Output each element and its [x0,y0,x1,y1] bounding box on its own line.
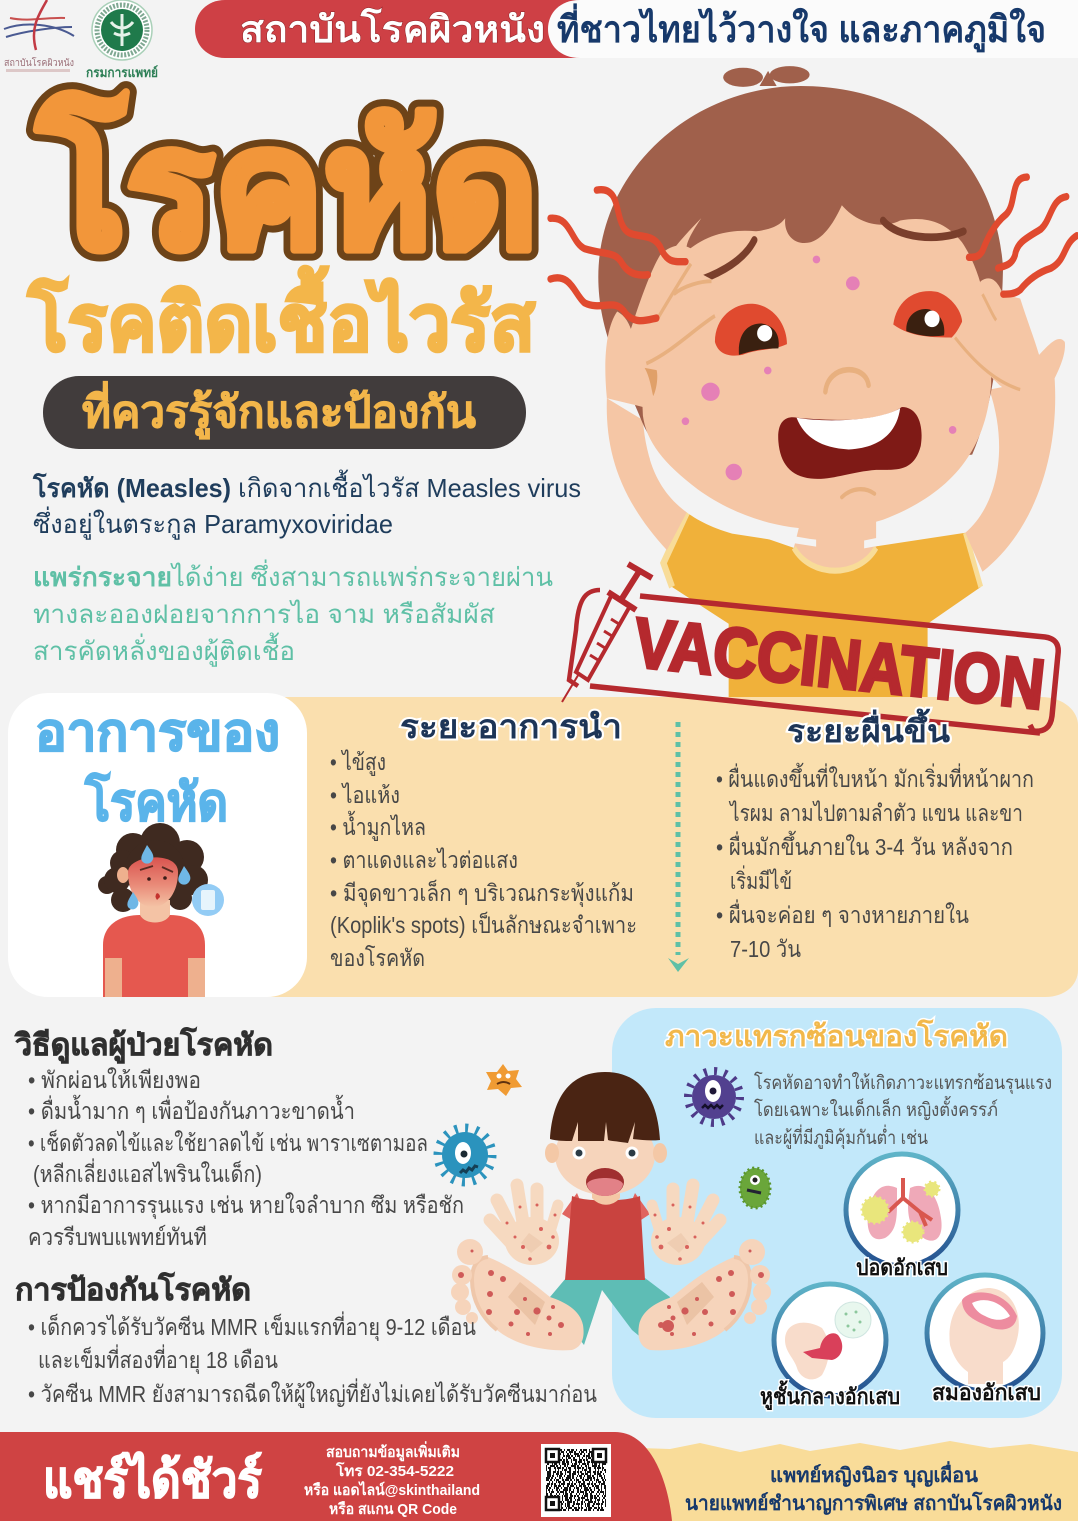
intro text: cause: ซึ่งอยู่ในตระกูล Paramyxoviridae [33,506,393,540]
footer credit text: แพทย์หญิงนิอร บุญเผื่อน [770,1460,978,1488]
footer contact: หรือ สแกน QR Code [329,1501,457,1518]
footer credit text: นายแพทย์ชำนาญการพิเศษ สถาบันโรคผิวหนัง [685,1491,1062,1515]
left eye [715,304,787,356]
arrow: progression between stages [668,722,689,972]
icon: brain [927,1275,1043,1405]
rash symptom list: 7-10 วัน [730,936,801,962]
feet [451,1239,771,1350]
symptom column: rash: ระยะผื่นขึ้น [787,708,950,749]
prevention list [28,1311,597,1408]
syringe [562,564,652,702]
fever squiggles [550,177,1077,321]
footer: red banner [0,1432,672,1521]
care list: • ดื่มน้ำมาก ๆ เพื่อป้องกันภาวะขาดน้ำ [28,1095,355,1124]
rash symptom list: • ผื่นจะค่อย ๆ จางหายภายใน [716,899,969,928]
footer contact [304,1441,480,1518]
care list: ควรรีบพบแพทย์ทันที [28,1224,207,1250]
symptom column: prodrome [330,708,637,971]
care list: • พักผ่อนให้เพียงพอ [28,1067,201,1093]
prodrome symptom list: • มีจุดขาวเล็ก ๆ บริเวณกระพุ้งแก้ม [330,878,634,907]
footer: doctor credit background [640,1441,1078,1521]
hair [598,66,1003,481]
prodrome symptom list: • น้ำมูกไหล [330,811,426,841]
left hand [605,245,718,407]
main title: โรคหัด [36,92,538,283]
panel: complications [612,1008,1062,1418]
icon: purple virus [688,1071,740,1123]
prodrome symptom list: • ตาแดงและไวต่อแสง [330,847,518,873]
panel: symptoms background [100,697,1078,997]
illustration: child with rash on hands and feet [451,1072,771,1350]
icon: blue virus [438,1128,492,1182]
logo: Department of Medical Services: กรมการแพทย์ [86,65,158,80]
prodrome symptom list: (Koplik's spots) เป็นลักษณะจำเพาะ [330,910,637,938]
illustration: sick child with red eyes [550,66,1077,702]
care heading: วิธีดูแลผู้ป่วยโรคหัด [14,1026,273,1064]
intro text: transmission: ได้ง่าย ซึ่งสามารถแพร่กระจายผ่าน [170,559,553,592]
panel: symptoms heading card: โรคหัด [84,771,228,832]
complications intro text: และผู้ที่มีภูมิคุ้มกันต่ำ เช่น [754,1124,928,1150]
care list [28,1067,464,1250]
care list: (หลีกเลี่ยงแอสไพรินในเด็ก) [33,1158,262,1187]
footer slogan: แชร์ได้ชัวร์ [43,1451,262,1508]
care list: • หากมีอาการรุนแรง เช่น หายใจลำบาก ซึม หรือชัก [28,1192,464,1219]
prevention list: และเข็มที่สองที่อายุ 18 เดือน [38,1344,278,1374]
header text: institute: สถาบันโรคผิวหนัง [240,7,545,50]
footer contact: โทร 02-354-5222 [335,1461,454,1480]
icon: orange virus [486,1064,522,1096]
rash symptom list: เริ่มมีไข้ [730,865,792,894]
rash symptom list: • ผื่นแดงขึ้นที่ใบหน้า มักเริ่มที่หน้าผาก [716,763,1034,792]
prevention heading: การป้องกันโรคหัด [15,1271,251,1307]
rash symptom list: • ผื่นมักขึ้นภายใน 3-4 วัน หลังจาก [716,831,1013,860]
icon: middle ear [760,1284,900,1411]
rash symptom list [716,763,1034,962]
prevention list: • เด็กควรได้รับวัคซีน MMR เข็มแรกที่อายุ 9-12 เดือน [28,1311,476,1341]
face [642,205,991,529]
right eye [893,291,962,338]
icon: green virus [740,1168,770,1208]
dark pill heading: ที่ควรรู้จักและป้องกัน [82,381,476,439]
main title: โรคหัด [36,92,538,283]
dark pill heading [43,376,526,449]
logo: Department of Medical Services [86,0,158,80]
label: pneumonia: ปอดอักเสบ [856,1255,948,1280]
header text: slogan: ที่ชาวไทยไว้วางใจ และภาคภูมิใจ [557,3,1046,53]
header banner [195,0,1078,58]
label: encephalitis: สมองอักเสบ [932,1380,1041,1405]
symptom column: prodrome: ระยะอาการนำ [400,708,622,745]
prevention list: • วัคซีน MMR ยังสามารถฉีดให้ผู้ใหญ่ที่ยังไม่เคยได้รับวัคซีนมาก่อน [28,1378,597,1408]
symptom column: rash [716,708,1034,962]
intro text: cause [32,469,581,540]
prodrome symptom list: ของโรคหัด [330,945,425,971]
footer contact: สอบถามข้อมูลเพิ่มเติม [326,1441,460,1462]
vaccination stamp [562,564,1058,733]
complications intro text [754,1071,1052,1150]
mouth [778,407,922,479]
prodrome symptom list: • ไข้สูง [330,749,386,776]
subtitle: โรคติดเชื้อไวรัส [27,266,535,367]
label: otitis media: หูชั้นกลางอักเสบ [760,1380,900,1411]
rash symptom list: ไรผม ลามไปตามลำตัว แขน และขา [728,800,1023,826]
QR code [541,1444,611,1517]
intro text: transmission: แพร่กระจาย [33,562,172,592]
care list: • เช็ดตัวลดไข้และใช้ยาลดไข้ เช่น พาราเซตามอล [28,1128,428,1156]
complications intro text: โดยเฉพาะในเด็กเล็ก หญิงตั้งครรภ์ [754,1096,998,1121]
right hand [952,278,1065,394]
logo: Institute of Dermatology: สถาบันโรคผิวหนัง [4,56,74,69]
prodrome symptom list: • ไอแห้ง [330,782,400,808]
panel: symptoms heading card [8,693,307,997]
logo: Institute of Dermatology [4,0,74,72]
panel: symptoms heading card: อาการของ [35,704,280,762]
panel: complications: ภาวะแทรกซ้อนของโรคหัด [665,1018,1008,1053]
icon: feverish girl [98,823,224,997]
intro text: transmission: ทางละอองฝอยจากการไอ จาม หรือสัมผัส [33,599,495,629]
prodrome symptom list [330,749,637,971]
icon: lungs [846,1154,958,1280]
intro text: transmission [33,559,553,667]
intro text: cause: โรคหัด (Measles) [32,472,231,503]
footer contact: หรือ แอดไลน์@skinthailand [304,1480,480,1499]
footer credit text [685,1460,1062,1515]
intro text: cause: เกิดจากเชื้อไวรัส Measles virus [238,469,581,503]
hands [490,1185,720,1265]
intro text: transmission: สารคัดหลั่งของผู้ติดเชื้อ [33,632,295,667]
